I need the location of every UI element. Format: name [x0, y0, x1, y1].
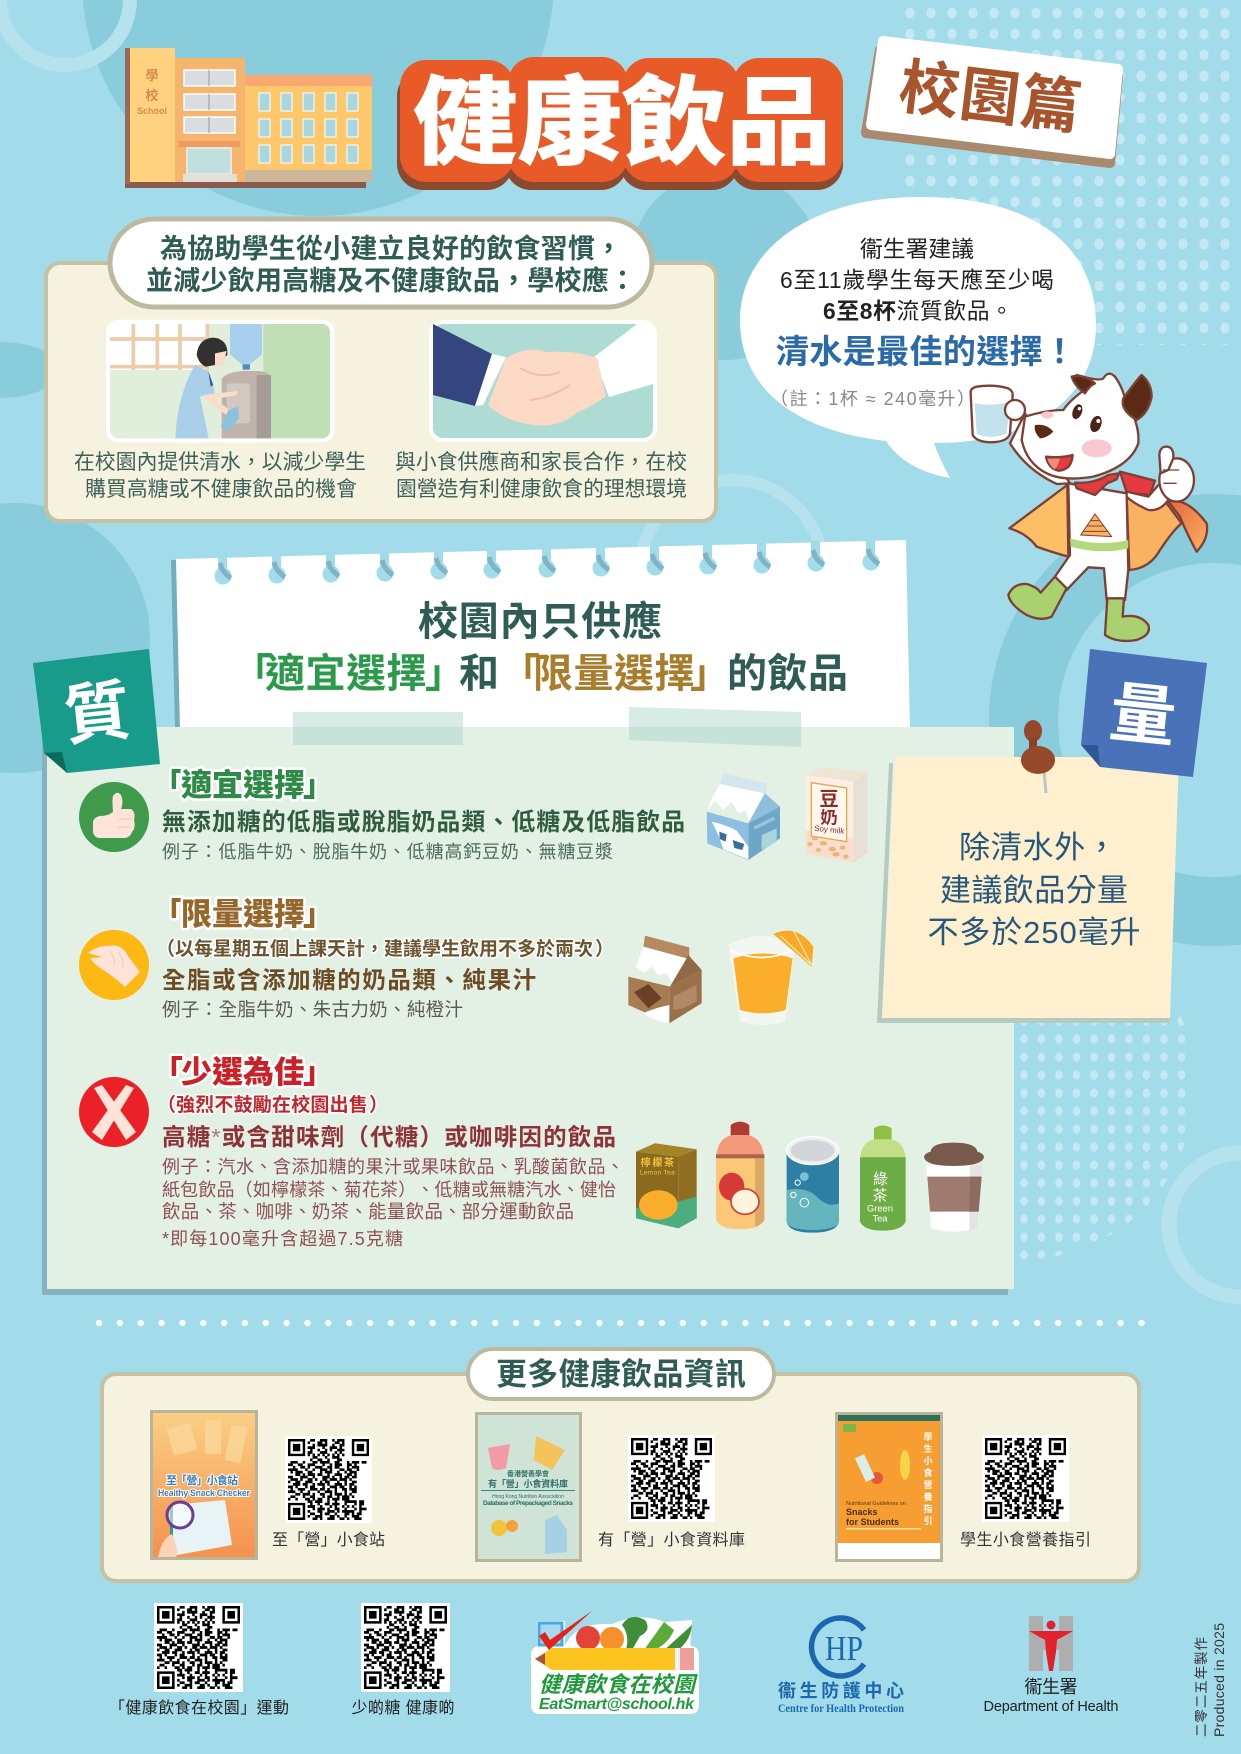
qr: EatSmart campaign: [109, 1603, 289, 1717]
panel: quality choices: [42, 727, 1014, 1295]
row: limited choice: [79, 897, 614, 1020]
caption: water: 在校園內提供清水，以減少學生: [74, 451, 366, 474]
logo: Department of Health: Department of Health: [984, 1699, 1118, 1715]
image: student at water dispenser: [106, 320, 335, 442]
qr: EatSmart campaign: 「健康飲食在校園」運動: [109, 1699, 289, 1717]
speech bubble: （註：1杯 ≈ 240毫升）: [770, 389, 975, 409]
icon: pinch hand: [79, 930, 149, 1000]
title: [397, 57, 843, 190]
icon: green tea bottle: Green: [867, 1204, 893, 1214]
speech bubble: [740, 197, 1096, 478]
icon: school building: School: [137, 106, 167, 116]
note: strongly discouraged: ）: [369, 1094, 388, 1116]
logo: Centre for Health Protection: [778, 1618, 904, 1715]
icon: green tea bottle: [860, 1125, 906, 1231]
logo: Centre for Health Protection: Centre for Health Protection: [778, 1701, 904, 1715]
panel: more information: [102, 1349, 1139, 1581]
note: strongly discouraged: 強烈不鼓勵在校園出售: [176, 1093, 368, 1116]
production note: 二零二五年製作: [1194, 1637, 1209, 1737]
heading: less is better: 「: [152, 1055, 183, 1090]
heading: limited choice: [152, 897, 334, 932]
poster: Healthy Snack Checker: 至「營」小食站: [166, 1473, 238, 1487]
heading: suitable and limited choices: 的飲品: [727, 652, 848, 696]
icon: school building: [125, 48, 372, 188]
heading pill: [110, 219, 652, 307]
note: quantity: 建議飲品分量: [940, 873, 1128, 908]
poster: nutritional guidelines: 指: [923, 1503, 933, 1514]
icon: school building: 學: [145, 68, 159, 83]
poster: database of prepackaged snacks: 香港營養學會: [507, 1469, 549, 1478]
icon: soy milk carton: [806, 767, 868, 863]
icon: lemon tea box: [636, 1143, 697, 1228]
row: less is better: 高糖*或含甜味劑（代糖）或咖啡因的飲品: [162, 1123, 616, 1150]
heading: suitable choice: 適宜選擇: [181, 768, 305, 803]
heading: suitable choice: 「: [152, 768, 183, 803]
heading pill: 為協助學生從小建立良好的飲食習慣，: [160, 234, 622, 264]
heading: suitable and limited choices: 適宜選擇: [265, 652, 427, 696]
subtitle card: 校園篇: [896, 53, 1084, 142]
row: less is better: [79, 1055, 624, 1249]
qr code 3: [982, 1435, 1069, 1522]
heading: less is better: 少選為佳: [181, 1055, 305, 1090]
poster: Healthy Snack Checker: [150, 1410, 258, 1560]
tag: quality: [33, 649, 160, 773]
note: quantity: 不多於250毫升: [928, 915, 1140, 950]
poster: nutritional guidelines: for Students: [846, 1517, 899, 1527]
row: less is better: 紙包飲品（如檸檬茶、菊花茶）、低糖或無糖汽水、健怡: [162, 1180, 616, 1200]
logo: Department of Health: [984, 1616, 1118, 1715]
note: limit per week: ）: [595, 938, 614, 960]
drinks illustrations: [628, 767, 984, 1233]
dotted divider: [99, 1320, 1142, 1326]
icon: school building: 校: [145, 88, 159, 103]
row: suitable choice: [79, 768, 685, 862]
poster: nutritional guidelines: 養: [923, 1491, 933, 1502]
qr code 1: [285, 1436, 372, 1523]
heading: suitable choice: [152, 768, 334, 803]
heading: less is better: [152, 1055, 334, 1090]
icon: thumbs up: [79, 782, 149, 852]
heading: suitable and limited choices: 限量選擇: [533, 652, 695, 696]
heading pill: [468, 1349, 774, 1399]
icon: green tea bottle: Tea: [872, 1213, 888, 1223]
icon: soy milk carton: Soy milk: [814, 824, 845, 836]
heading: suitable and limited choices: 「: [500, 652, 540, 696]
row: less is better: 飲品、茶、咖啡、奶茶、能量飲品、部分運動飲品: [162, 1201, 574, 1222]
note: quantity: 除清水外，: [959, 830, 1117, 865]
icon: apple juice bottle: [716, 1122, 764, 1229]
mascot: dog superhero with glass of water: [971, 374, 1207, 641]
poster: nutritional guidelines: Nutritional Guidelines on: [846, 1501, 906, 1507]
speech bubble: 衞生署建議: [860, 236, 974, 262]
tag: quantity: 量: [1106, 675, 1180, 755]
heading pill: 更多健康飲品資訊: [496, 1357, 746, 1392]
caption 2: 有「營」小食資料庫: [598, 1531, 745, 1549]
logo: EatSmart@school.hk: EatSmart@school.hk: [539, 1696, 695, 1713]
speech bubble: 6至8杯流質飲品。: [823, 298, 1013, 324]
icon: green tea bottle: 茶: [873, 1188, 888, 1205]
caption: cooperation: 園營造有利健康飲食的理想環境: [396, 478, 687, 501]
qr code 2: [628, 1435, 715, 1522]
tag: quantity: [1081, 649, 1207, 777]
speech bubble: 6至11歲學生每天應至少喝: [780, 267, 1054, 293]
speech bubble: 清水是最佳的選擇！: [776, 333, 1076, 370]
icon: lemon tea box: 檸檬茶: [641, 1156, 674, 1169]
heading: limited choice: 」: [303, 897, 334, 932]
heading: limited choice: 「: [152, 897, 183, 932]
heading: suitable and limited choices: 」: [690, 652, 730, 696]
row: suitable choice: 例子：低脂牛奶、脫脂牛奶、低糖高鈣豆奶、無糖豆漿: [162, 842, 613, 862]
heading: limited choice: 限量選擇: [181, 897, 305, 932]
poster: database of prepackaged snacks: [475, 1412, 582, 1562]
caption: cooperation: [395, 450, 687, 501]
title: 健康飲品: [413, 70, 831, 177]
image: handshake: [429, 320, 657, 442]
caption: water: 購買高糖或不健康飲品的機會: [85, 478, 357, 501]
tape strips: [293, 707, 801, 747]
poster: nutritional guidelines: Snacks: [846, 1507, 878, 1517]
poster: nutritional guidelines: 引: [923, 1515, 933, 1526]
row: limited choice: 例子：全脂牛奶、朱古力奶、純橙汁: [162, 999, 463, 1020]
qr: less sugar: [352, 1603, 454, 1717]
qr: less sugar: 少啲糖 健康啲: [352, 1699, 454, 1717]
logo: EatSmart@school.hk: [531, 1611, 699, 1714]
caption: water: [74, 451, 366, 501]
row: less is better: 例子：汽水、含添加糖的果汁或果味飲品、乳酸菌飲品、: [162, 1157, 624, 1177]
icon: soda can: [787, 1137, 839, 1233]
production note: Produced in 2025: [1211, 1623, 1227, 1737]
poster: Healthy Snack Checker: Healthy Snack Checker: [158, 1488, 250, 1498]
poster: nutritional guidelines: 食: [923, 1467, 933, 1478]
panel: school actions: [46, 219, 716, 521]
heading: suitable and limited choices: 」: [425, 652, 466, 696]
caption: cooperation: 與小食供應商和家長合作，在校: [395, 450, 687, 474]
icon: green tea bottle: 綠: [873, 1171, 888, 1188]
logo: Department of Health: 衞生署: [1024, 1677, 1078, 1697]
poster: database of prepackaged snacks: Database of Prepackaged Snacks: [483, 1500, 573, 1507]
production note: [1194, 1623, 1227, 1737]
logo: Centre for Health Protection: 衞生防護中心: [778, 1680, 904, 1701]
row: limited choice: 全脂或含添加糖的奶品類、純果汁: [162, 967, 536, 993]
heading: suitable and limited choices: 和: [459, 652, 500, 696]
icon: soy milk carton: 豆: [819, 789, 839, 810]
heading: only supply: 校園內只供應: [418, 600, 662, 644]
icon: crossed arms: [79, 1077, 149, 1147]
notebook paper: [171, 540, 910, 730]
note: limit per week: （: [156, 938, 175, 960]
heading: suitable choice: 」: [303, 768, 334, 803]
icon: orange juice: [728, 931, 813, 1025]
note: quantity: [877, 757, 1179, 1023]
heading: suitable and limited choices: 「: [232, 652, 272, 696]
heading: less is better: 」: [303, 1055, 334, 1090]
icon: lemon tea box: Lemon Tea: [640, 1170, 675, 1177]
subtitle card: [866, 41, 1118, 163]
heading: suitable and limited choices: [232, 652, 848, 696]
note: strongly discouraged: （: [157, 1094, 176, 1116]
poster: nutritional guidelines: [835, 1412, 943, 1562]
poster: database of prepackaged snacks: Hong Kong Nutrition Association: [492, 1494, 564, 1500]
row: suitable choice: 無添加糖的低脂或脫脂奶品類、低糖及低脂飲品: [162, 808, 685, 836]
background: [0, 0, 1241, 1304]
icon: coffee cup: [924, 1143, 984, 1232]
poster: nutritional guidelines: 小: [923, 1455, 933, 1466]
poster: nutritional guidelines: 學: [923, 1431, 933, 1442]
heading pill: 並減少飲用高糖及不健康飲品，學校應：: [146, 265, 636, 296]
poster: nutritional guidelines: 生: [923, 1443, 933, 1454]
icon: chocolate milk carton: [628, 936, 702, 1023]
poster: nutritional guidelines: 營: [923, 1479, 933, 1490]
caption 3: 學生小食營養指引: [960, 1531, 1091, 1549]
poster: database of prepackaged snacks: 有「營」小食資料庫: [488, 1478, 568, 1489]
icon: push pin: [1021, 720, 1055, 793]
note: limit per week: 以每星期五個上課天計，建議學生飲用不多於兩次: [175, 937, 593, 960]
icon: blue milk carton: [707, 773, 780, 860]
row: less is better: *即每100毫升含超過7.5克糖: [162, 1229, 403, 1249]
tag: quality: 質: [60, 673, 134, 753]
icon: soy milk carton: 奶: [820, 808, 838, 828]
logo: Centre for Health Protection: HP: [825, 1629, 863, 1668]
logo: EatSmart@school.hk: 健康飲食在校園: [539, 1672, 698, 1697]
caption 1: 至「營」小食站: [272, 1531, 385, 1549]
